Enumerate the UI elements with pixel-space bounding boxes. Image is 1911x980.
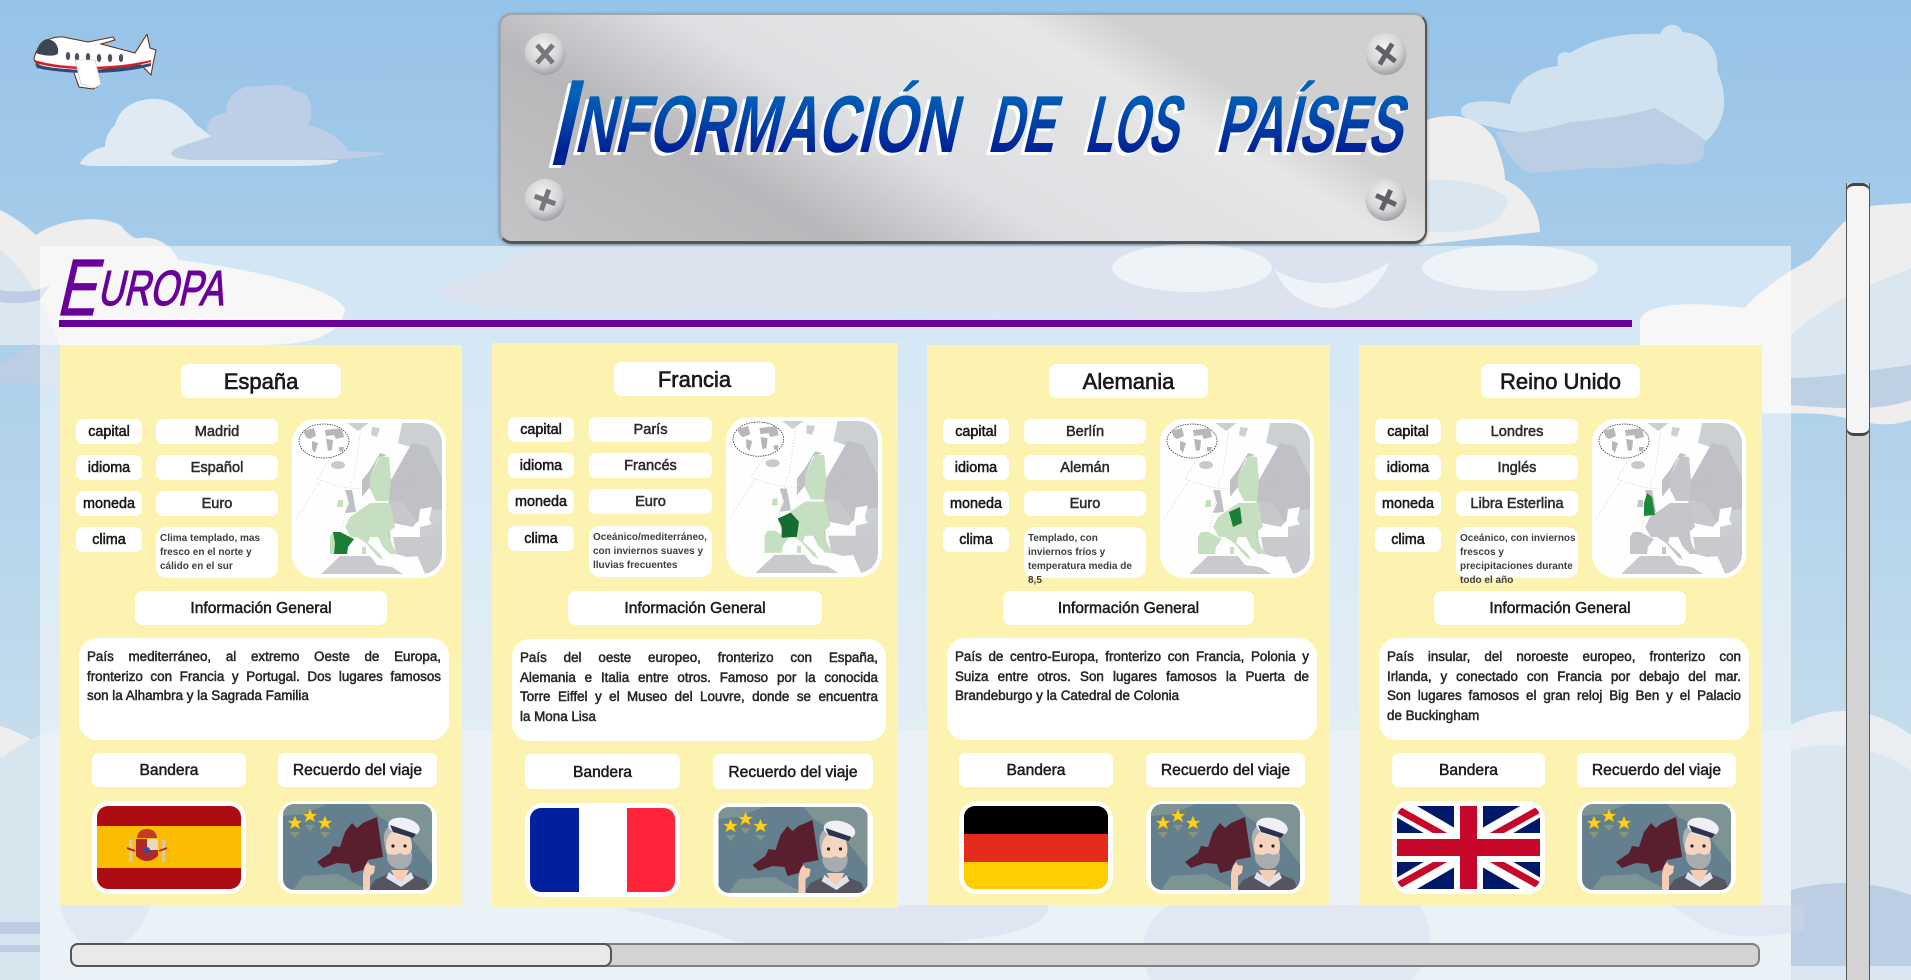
souvenir image: captain with Europe map (1577, 801, 1736, 894)
panel: Reino Unido: todo el año (1460, 575, 1513, 586)
general information text: Alemania e Italia entre otros. Famoso por la conocida (520, 670, 878, 685)
label: clima (76, 527, 142, 552)
label: clima: clima (959, 532, 993, 548)
map: España en Europa (292, 419, 446, 578)
value: idioma: Español (191, 460, 243, 476)
map: Alemania en Europa (1160, 419, 1314, 578)
heading underline (59, 320, 1632, 327)
value: moneda (156, 491, 278, 516)
label: Bandera (92, 753, 246, 787)
label: Recuerdo del viaje (278, 753, 437, 787)
label: idioma (508, 453, 574, 478)
title: nformación (568, 47, 979, 177)
label: Bandera (525, 754, 680, 789)
value: idioma (1456, 455, 1578, 480)
label: idioma: idioma (1387, 460, 1429, 476)
flag: Francia (525, 803, 680, 897)
souvenir image: captain with Europe map (713, 803, 873, 897)
heading: Europa (52, 250, 238, 320)
label: clima: clima (92, 532, 126, 548)
label: moneda: moneda (1382, 496, 1434, 512)
label: Recuerdo del viaje: Recuerdo del viaje (728, 764, 858, 780)
general information text: son la Alhambra y la Sagrada Familia (87, 688, 309, 703)
value: clima: con inviernos suaves y (593, 546, 703, 557)
label: clima: clima (524, 531, 558, 547)
label: Recuerdo del viaje: Recuerdo del viaje (1592, 762, 1721, 779)
heading: Información General (1003, 591, 1254, 625)
value: capital (589, 417, 712, 442)
value: clima: lluvias frecuentes (593, 560, 677, 571)
label: capital: capital (955, 424, 997, 440)
value: moneda: Euro (1070, 496, 1100, 512)
label: capital: capital (1387, 424, 1429, 440)
heading: Información General: Información General (1489, 600, 1631, 617)
general information text: Brandeburgo y la Catedral de Colonia (955, 688, 1179, 703)
label: clima (1375, 527, 1441, 552)
value: moneda: Libra Esterlina (1470, 496, 1564, 512)
label: moneda (943, 491, 1009, 516)
screw: top left (524, 33, 566, 75)
title: de (981, 47, 1077, 177)
label: moneda (508, 489, 574, 514)
label: moneda (76, 491, 142, 516)
value: moneda (589, 489, 712, 514)
value: clima (1456, 527, 1578, 578)
screw: top right (1366, 33, 1406, 75)
panel: España (60, 345, 462, 905)
label: capital: capital (520, 422, 562, 438)
label: capital (76, 419, 142, 444)
label: capital: capital (88, 424, 130, 440)
label: Bandera (959, 753, 1113, 787)
country name (1049, 364, 1208, 398)
label: capital (1375, 419, 1441, 444)
general information text: Torre Eiffel y el Museo del Louvre, donde se encuentra (520, 689, 878, 704)
label: idioma (76, 455, 142, 480)
value: idioma (589, 453, 712, 478)
value: capital: París (633, 422, 668, 438)
value: idioma (156, 455, 278, 480)
country name (614, 362, 775, 396)
general information text: País de centro-Europa, fronterizo con Francia, Polonia y (955, 649, 1309, 664)
vertical scrollbar (1846, 183, 1870, 980)
title plate (499, 13, 1427, 244)
map: Reino Unido en Europa (1592, 419, 1746, 578)
value: clima: Clima templado, mas (160, 533, 260, 544)
country name: Francia (658, 366, 731, 392)
label: Recuerdo del viaje: Recuerdo del viaje (293, 762, 422, 779)
value: clima (156, 527, 278, 578)
general information text: País insular, del noroeste europeo, fronterizo con (1387, 649, 1741, 664)
label: moneda: moneda (515, 494, 567, 510)
general information text: Son lugares famosos el gran reloj Big Ben y el Palacio (1387, 688, 1741, 703)
screw: bottom right (1366, 179, 1406, 221)
souvenir image: captain with Europe map (1146, 801, 1305, 894)
souvenir image: captain with Europe map (278, 801, 437, 894)
general information text (512, 639, 886, 741)
value: capital (1456, 419, 1578, 444)
icon: airplane (34, 34, 157, 90)
label: capital (943, 419, 1009, 444)
label: clima: clima (1391, 532, 1425, 548)
general information text (79, 638, 449, 740)
country name (1481, 364, 1640, 398)
value: clima (1024, 527, 1146, 578)
value: moneda: Euro (202, 496, 232, 512)
horizontal scrollbar (70, 943, 1760, 967)
title: los (1078, 47, 1201, 177)
value: capital (1024, 419, 1146, 444)
panel: Alemania (927, 345, 1330, 905)
general information text: Irlanda, y conectado con Francia por debajo del mar. (1387, 669, 1741, 684)
value: idioma: Alemán (1060, 460, 1110, 476)
general information text: Suiza entre otros. Son lugares famosos la Puerta de (955, 669, 1309, 684)
panel: Reino Unido (1359, 345, 1762, 905)
panel: Alemania: 8,5 (1028, 575, 1042, 586)
label: idioma (1375, 455, 1441, 480)
value: clima: Oceánico, con inviernos (1460, 533, 1576, 544)
general information text: fronterizo con Francia y Portugal. Dos lugares famosos (87, 669, 441, 684)
general information text: País mediterráneo, al extremo Oeste de Europa, (87, 649, 441, 664)
country name (181, 364, 341, 398)
label: idioma: idioma (520, 458, 562, 474)
value: idioma: Francés (624, 458, 677, 474)
heading: Información General: Información General (190, 600, 332, 617)
label: Recuerdo del viaje: Recuerdo del viaje (1161, 762, 1290, 779)
translucent content panel (40, 246, 1791, 980)
scrollbar thumb (1846, 183, 1870, 436)
flag: Alemania (959, 801, 1113, 894)
country name: España (224, 368, 298, 394)
heading: Información General (135, 591, 387, 625)
label: idioma (943, 455, 1009, 480)
country name: Alemania (1083, 368, 1174, 394)
value: capital (156, 419, 278, 444)
value: capital: Madrid (195, 424, 239, 440)
label: Recuerdo del viaje (1577, 753, 1736, 787)
label: clima (508, 526, 574, 551)
value: moneda: Euro (635, 494, 666, 510)
label: clima (943, 527, 1009, 552)
title (541, 47, 1425, 192)
value: clima: fresco en el norte y (160, 547, 252, 558)
panel: Francia (492, 343, 898, 908)
value: clima: inviernos fríos y (1028, 547, 1105, 558)
label: Bandera: Bandera (140, 762, 198, 779)
label: idioma: idioma (88, 460, 130, 476)
value: clima: precipitaciones durante (1460, 561, 1573, 572)
flag: España (92, 801, 246, 894)
label: moneda (1375, 491, 1441, 516)
label: Bandera (1392, 753, 1545, 787)
heading: Información General: Información General (624, 600, 766, 617)
value: idioma (1024, 455, 1146, 480)
general information text: de Buckingham (1387, 708, 1479, 723)
value: clima: frescos y (1460, 547, 1504, 558)
general information text: la Mona Lisa (520, 709, 596, 724)
screw: bottom left (524, 179, 566, 221)
value: capital: Berlín (1066, 424, 1104, 440)
label: Bandera: Bandera (1007, 762, 1065, 779)
value: clima: temperatura media de (1028, 561, 1132, 572)
label: moneda: moneda (950, 496, 1002, 512)
value: clima: Templado, con (1028, 533, 1098, 544)
value: clima: Oceánico/mediterráneo, (593, 532, 707, 543)
scrollbar thumb (70, 943, 612, 967)
label: capital (508, 417, 574, 442)
country name: Reino Unido (1500, 368, 1621, 394)
value: idioma: Inglés (1498, 460, 1536, 476)
label: Recuerdo del viaje (1146, 753, 1305, 787)
label: idioma: idioma (955, 460, 997, 476)
value: clima: cálido en el sur (160, 561, 233, 572)
heading: Información General (1434, 591, 1686, 625)
label: Recuerdo del viaje (713, 754, 873, 789)
general information text (1379, 638, 1749, 740)
label: Bandera: Bandera (1439, 762, 1498, 779)
heading: Información General (568, 591, 822, 625)
value: moneda (1024, 491, 1146, 516)
value: capital: Londres (1491, 424, 1543, 440)
general information text (947, 638, 1317, 740)
title: I (541, 54, 596, 192)
general information text: País del oeste europeo, fronterizo con España, (520, 650, 878, 665)
heading: Información General: Información General (1058, 600, 1199, 617)
value: clima (589, 526, 712, 577)
value: moneda (1456, 491, 1578, 516)
flag: Reino Unido (1392, 801, 1545, 894)
label: Bandera: Bandera (573, 764, 632, 780)
label: moneda: moneda (83, 496, 135, 512)
map: Francia en Europa (726, 417, 882, 577)
